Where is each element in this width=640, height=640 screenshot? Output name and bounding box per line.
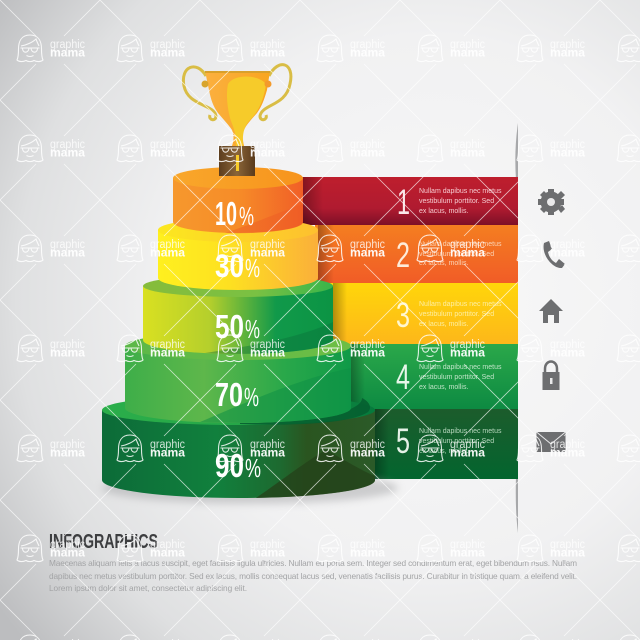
trophy handles xyxy=(183,65,291,120)
chart: stacked percentage cake xyxy=(102,167,398,504)
tier 90%: % xyxy=(245,453,261,483)
bar 2 orange: ex lacus, mollis. xyxy=(419,260,468,267)
bar 3 yellow: ex lacus, mollis. xyxy=(419,321,468,328)
bar 2 orange xyxy=(315,225,518,283)
side panel divider xyxy=(515,123,518,533)
bar 1 red: vestibulum porttitor. Sed xyxy=(419,198,494,205)
bar 3 yellow xyxy=(330,283,518,344)
trophy cup xyxy=(205,71,270,146)
icon: envelope xyxy=(536,432,566,452)
tier 90%: 90 xyxy=(215,447,244,484)
icon: home xyxy=(539,299,563,323)
tier 50% xyxy=(143,275,333,354)
tier 70% xyxy=(125,332,351,423)
bar 3 yellow: vestibulum porttitor. Sed xyxy=(419,311,494,318)
bar 1 red xyxy=(300,177,518,225)
bar 2 orange: Nullam dapibus nec metus xyxy=(419,241,502,248)
bar 3 yellow: Nullam dapibus nec metus xyxy=(419,301,502,308)
body text: dapibus nec metus vestibulum porttitor. Sed ex lacus, mollis consequat lacus sed, venenatis facilisis purus. Curabitur in tristique quam, a eleifend velit. xyxy=(49,571,577,581)
bar 2 orange: vestibulum porttitor. Sed xyxy=(419,251,494,258)
ground shadow xyxy=(102,472,398,504)
tier 70%: % xyxy=(244,382,259,412)
tier 70%: 70 xyxy=(215,376,243,413)
bar 1 red: ex lacus, mollis. xyxy=(419,208,468,215)
tier 10%: 10 xyxy=(215,195,237,232)
bar 5 dark green: ex lacus, mollis. xyxy=(419,448,468,455)
tier 10%: % xyxy=(239,201,254,231)
title: INFOGRAPHICS xyxy=(49,531,158,553)
icon: gear xyxy=(538,189,565,215)
tier 10% xyxy=(173,167,303,233)
bar 4 green: ex lacus, mollis. xyxy=(419,384,468,391)
bar 3 yellow: 3 xyxy=(396,296,410,335)
panel: numbered colour bars xyxy=(300,177,518,479)
tier 30%: % xyxy=(245,253,260,283)
bar 5 dark green: vestibulum porttitor. Sed xyxy=(419,438,494,445)
tier 30% xyxy=(158,218,318,290)
icon: lock xyxy=(542,362,560,390)
tier 30%: 30 xyxy=(215,248,244,284)
body text: Maecenas aliquam felis a lacus suscipit, eget facilisis ligula ultricies. Nullam eu porta sem. Integer sed condimentum erat, eget bibendum risus. Nullam xyxy=(49,558,577,568)
tier 50%: 50 xyxy=(215,308,244,345)
tier 50%: % xyxy=(245,314,260,344)
trophy base xyxy=(219,146,255,176)
bar 5 dark green: 5 xyxy=(396,422,410,461)
bar 4 green: 4 xyxy=(396,358,410,397)
bar 2 orange: 2 xyxy=(396,236,410,275)
bar 4 green xyxy=(348,344,518,409)
bar 4 green: Nullam dapibus nec metus xyxy=(419,364,502,371)
icon: phone xyxy=(544,241,565,268)
bar 4 green: vestibulum porttitor. Sed xyxy=(419,374,494,381)
tier 90% xyxy=(102,395,375,498)
bar 1 red: Nullam dapibus nec metus xyxy=(419,188,502,195)
bar 5 dark green xyxy=(372,409,518,479)
bar 1 red: 1 xyxy=(397,183,410,222)
bar 5 dark green: Nullam dapibus nec metus xyxy=(419,428,502,435)
icon: trophy xyxy=(183,65,291,176)
body text: Lorem ipsum dolor sit amet, consectetur adipiscing elit. xyxy=(49,583,247,593)
